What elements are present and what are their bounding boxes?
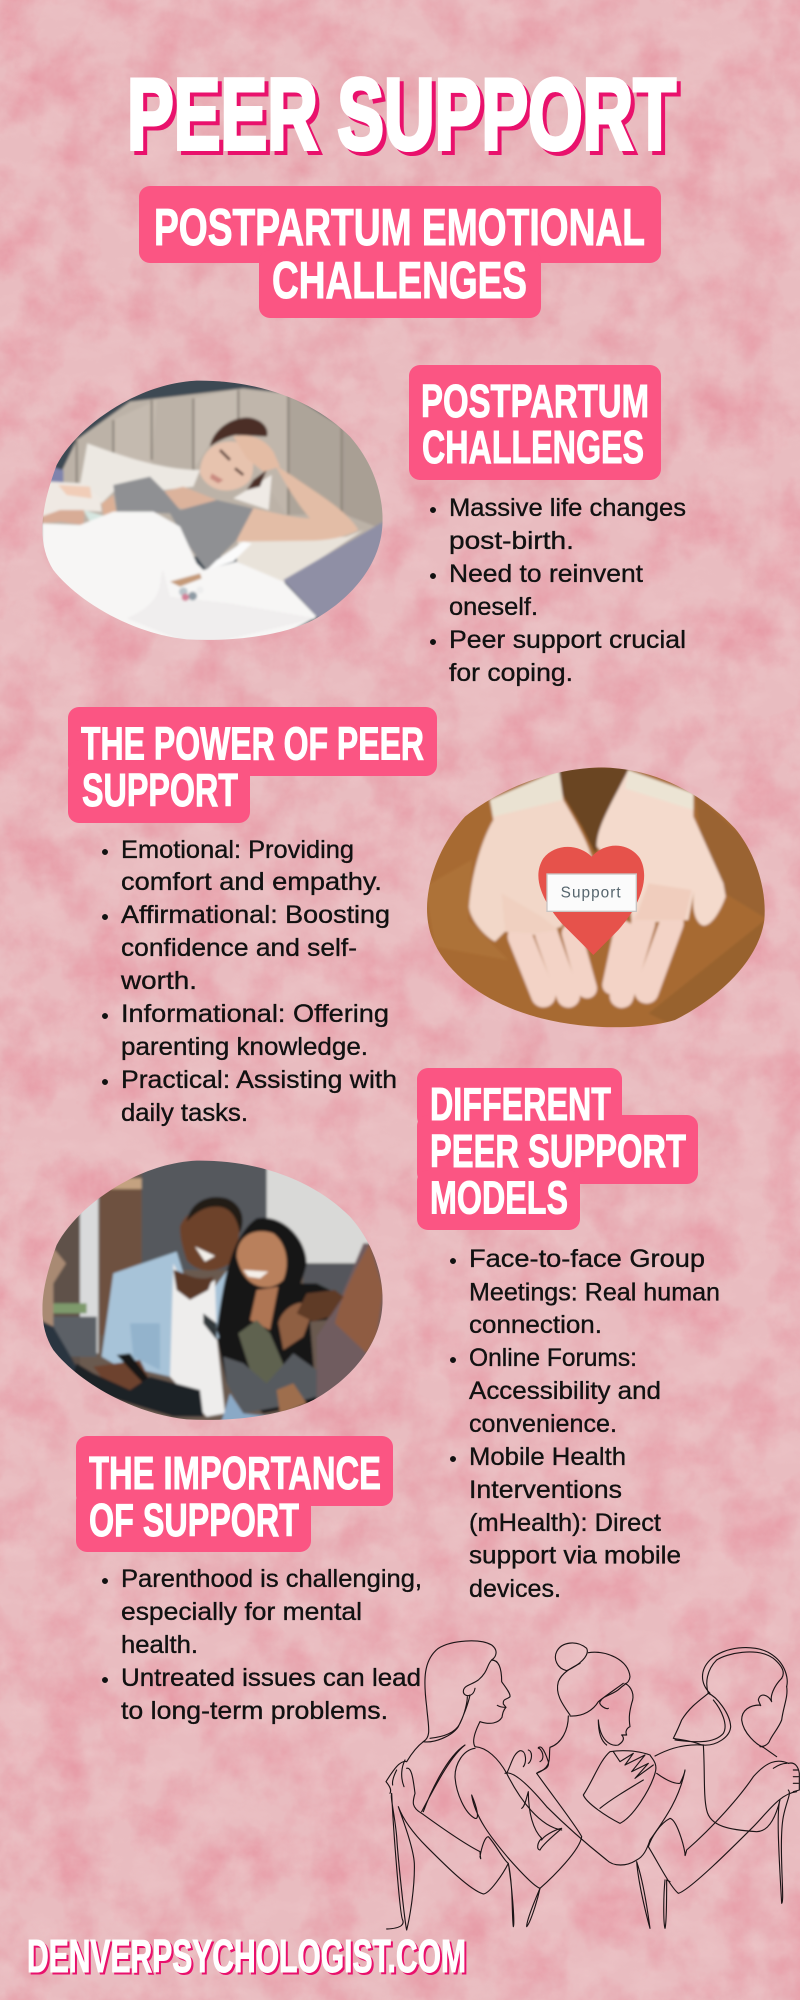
- bullet list: importance of support: health.: [121, 1631, 198, 1659]
- bullet list: peer support models: support via mobile: [469, 1542, 681, 1570]
- bullet list: power of peer support: Emotional: Providing: [121, 836, 354, 864]
- bullet list: importance of support: Parenthood is challenging,: [121, 1565, 422, 1593]
- bullet list: peer support models: (mHealth): Direct: [469, 1509, 661, 1537]
- photo: tired mother resting in bed: [42, 380, 382, 640]
- bullet list: power of peer support: Practical: Assisting with: [121, 1066, 397, 1094]
- bullet list: peer support models: connection.: [469, 1311, 602, 1339]
- bullet list: power of peer support: Informational: Offering: [121, 1000, 389, 1028]
- photo: hands holding a red heart labelled support: [427, 767, 765, 1028]
- bullet list: power of peer support: worth.: [120, 967, 197, 995]
- bullet list: importance of support: Untreated issues can lead: [121, 1664, 421, 1692]
- bullet list: peer support models: Face-to-face Group: [469, 1245, 705, 1273]
- heading: postpartum challenges: [409, 365, 661, 480]
- heading: postpartum emotional challenges: CHALLENGES: [272, 252, 527, 310]
- bullet list: power of peer support: [102, 836, 397, 1127]
- bullet list: peer support models: Meetings: Real human: [469, 1278, 720, 1306]
- heading: the power of peer support: THE POWER OF PEER: [81, 718, 424, 770]
- footer website: DENVERPSYCHOLOGIST.COM: [29, 1932, 468, 1984]
- photo: two laughing friends embracing: [42, 1160, 382, 1420]
- bullet list: importance of support: [102, 1565, 422, 1725]
- bullet list: importance of support: especially for mental: [121, 1598, 362, 1626]
- bullet list: power of peer support: comfort and empathy.: [121, 868, 382, 896]
- bullet list: postpartum challenges: Massive life changes: [449, 494, 686, 522]
- heading: different peer support models: DIFFERENT: [430, 1078, 611, 1130]
- bullet list: power of peer support: Affirmational: Boosting: [121, 901, 390, 929]
- heading: different peer support models: [417, 1068, 698, 1230]
- footer website: [27, 1930, 468, 1984]
- figure: right woman: [648, 1648, 799, 1928]
- bullet list: power of peer support: parenting knowledge.: [121, 1033, 368, 1061]
- footer website: DENVERPSYCHOLOGIST.COM: [27, 1930, 466, 1982]
- figure: left woman: [386, 1641, 582, 1930]
- bullet list: postpartum challenges: post-birth.: [449, 527, 574, 555]
- bullet list: power of peer support: confidence and self-: [121, 934, 357, 962]
- bullet list: importance of support: to long-term problems.: [121, 1697, 388, 1725]
- bullet list: peer support models: convenience.: [469, 1410, 617, 1438]
- line art: three women with arms on shoulders: [386, 1641, 799, 1930]
- icon: red wooden heart: [538, 846, 644, 955]
- heading: the power of peer support: SUPPORT: [82, 764, 238, 816]
- heading: the importance of support: [76, 1436, 393, 1552]
- bullet list: postpartum challenges: [430, 494, 686, 687]
- bullet list: postpartum challenges: Need to reinvent: [449, 560, 643, 588]
- heading: different peer support models: PEER SUPPORT: [430, 1125, 686, 1177]
- bullet list: postpartum challenges: oneself.: [449, 593, 538, 621]
- heading: postpartum emotional challenges: [139, 186, 661, 318]
- bullet list: peer support models: Interventions: [469, 1476, 622, 1504]
- bullet list: peer support models: [450, 1245, 720, 1603]
- bullet list: power of peer support: daily tasks.: [121, 1099, 248, 1127]
- bullet list: peer support models: Accessibility and: [469, 1377, 661, 1405]
- bullet list: postpartum challenges: Peer support crucial: [449, 626, 686, 654]
- figure: middle woman: [505, 1643, 703, 1928]
- bullet list: peer support models: Online Forums:: [469, 1344, 637, 1372]
- photo: hands holding a red heart labelled support: Support: [561, 884, 621, 901]
- heading: the importance of support: THE IMPORTANCE: [89, 1447, 381, 1499]
- bullet list: postpartum challenges: for coping.: [449, 659, 573, 687]
- heading: postpartum challenges: CHALLENGES: [422, 421, 644, 473]
- heading: postpartum challenges: POSTPARTUM: [421, 375, 649, 427]
- heading: the importance of support: OF SUPPORT: [89, 1494, 299, 1546]
- heading: the power of peer support: [68, 707, 437, 823]
- heading: different peer support models: MODELS: [430, 1172, 568, 1224]
- bullet list: peer support models: Mobile Health: [469, 1443, 626, 1471]
- bullet list: peer support models: devices.: [469, 1575, 561, 1603]
